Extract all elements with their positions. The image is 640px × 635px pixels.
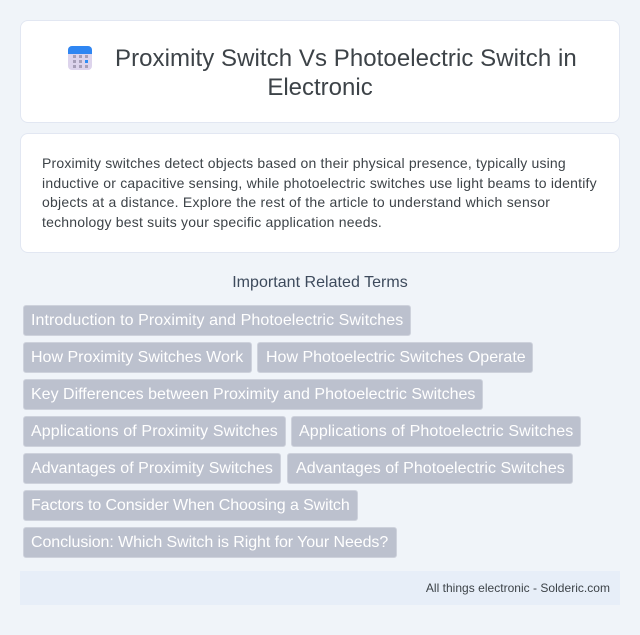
summary text: inductive or capacitive sensing, while photoelectric switches use light beams to identify [42, 174, 597, 190]
tag: Applications of Proximity Switches [31, 423, 278, 440]
tag [23, 342, 252, 373]
tag: Applications of Photoelectric Switches [299, 423, 573, 440]
tag [257, 342, 533, 373]
title: Proximity Switch Vs Photoelectric Switch in [115, 45, 577, 72]
tag: Factors to Consider When Choosing a Switch [31, 497, 350, 514]
summary text: Proximity switches detect objects based on their physical presence, typically using [42, 155, 566, 171]
tag [23, 453, 281, 484]
title: Electronic [267, 74, 373, 101]
tag: Introduction to Proximity and Photoelectric Switches [31, 312, 403, 329]
tag: Key Differences between Proximity and Photoelectric Switches [31, 386, 475, 403]
tag: Advantages of Proximity Switches [31, 460, 273, 477]
tag: How Photoelectric Switches Operate [266, 349, 526, 366]
panel: title card [20, 20, 620, 123]
icon: calendar [68, 46, 92, 70]
tag: Advantages of Photoelectric Switches [296, 460, 565, 477]
summary text [42, 155, 597, 230]
tag [23, 527, 397, 558]
tag [23, 305, 411, 336]
summary text: objects at a distance. Explore the rest of the article to understand which sensor [42, 194, 550, 210]
panel: summary [20, 133, 620, 253]
tag: How Proximity Switches Work [31, 349, 243, 366]
tag list [23, 305, 581, 558]
tag: Conclusion: Which Switch is Right for Your Needs? [31, 534, 388, 551]
tag [287, 453, 573, 484]
footer [20, 571, 620, 605]
summary text: technology best suits your specific application needs. [42, 214, 382, 230]
tag [23, 416, 286, 447]
heading: related terms: Important Related Terms [232, 274, 408, 291]
tag [23, 379, 483, 410]
tag [23, 490, 358, 521]
footer: All things electronic - Solderic.com [426, 581, 610, 595]
tag [291, 416, 581, 447]
title [115, 45, 577, 101]
